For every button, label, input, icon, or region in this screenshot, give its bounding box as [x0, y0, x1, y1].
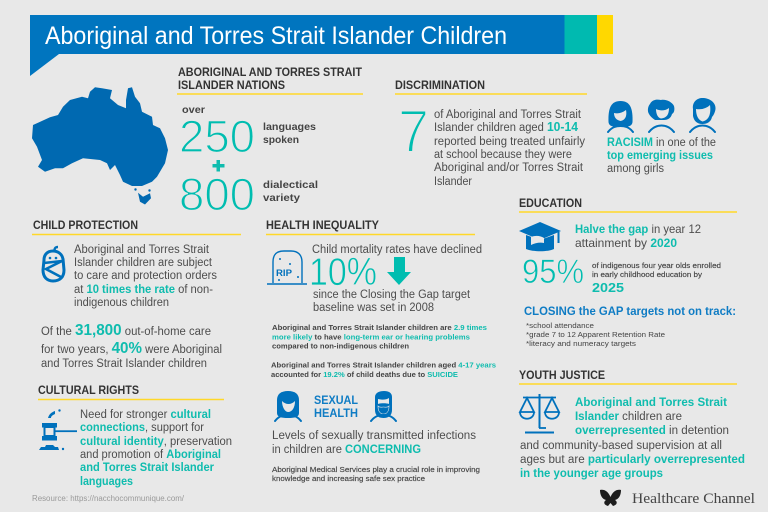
icon: butterfly — [600, 490, 621, 506]
text: hearing problems — [272, 323, 487, 350]
text: cultural rights body — [80, 409, 232, 488]
heading: cultural rights: CULTURAL RIGHTS — [38, 385, 139, 397]
text: care orders — [74, 244, 217, 309]
label: sexual health: SEXUAL — [314, 393, 358, 407]
text: suicide: accounted for 19.2% of child deaths due to SUICIDE — [271, 370, 458, 379]
text: care orders: at 10 times the rate of non- — [74, 284, 213, 296]
text: discrimination body: reported being treated unfairly — [434, 136, 585, 148]
text: hearing problems: Aboriginal and Torres Strait Islander children are 2.9 times — [272, 323, 487, 332]
text: racism callout: top emerging issues — [607, 150, 713, 162]
text: cultural rights body: languages — [80, 476, 133, 488]
label: dialectical variety — [263, 179, 318, 204]
text: hearing problems: more likely to have long-term ear or hearing problems — [272, 332, 470, 342]
text: youth justice body: in the younger age groups — [520, 468, 663, 480]
text: infection levels — [272, 430, 476, 456]
icon: RIP gravestone: RIP — [276, 268, 292, 278]
text: out-of-home care: Of the 31,800 out-of-home care — [41, 322, 211, 339]
text: halve the gap: Halve the gap in year 12 — [575, 222, 701, 236]
panel: child protection — [32, 220, 241, 370]
text: youth justice body: and community-based supervision at all — [520, 440, 722, 452]
text: racism callout — [607, 137, 716, 175]
text: suicide: Aboriginal and Torres Strait Islander children aged 4-17 years — [271, 360, 496, 370]
text: hearing problems: compared to non-indigenous children — [272, 342, 409, 350]
text: discrimination body: Islander children aged 10-14 — [434, 120, 578, 134]
text: discrimination body: at school because they were — [434, 149, 572, 161]
heading: nations: ABORIGINAL AND TORRES STRAIT — [178, 67, 362, 79]
title: Aboriginal and Torres Strait Islander Children — [45, 22, 507, 50]
icon: swaddled baby — [43, 247, 64, 281]
text: racism callout: RACISIM in one of the — [607, 137, 716, 149]
text: youth justice body: ages but are particularly overrepresented — [520, 454, 745, 466]
logo: Healthcare Channel — [600, 490, 755, 507]
heading: nations: ISLANDER NATIONS — [178, 80, 285, 92]
heading: education: EDUCATION — [519, 198, 582, 210]
text: racism callout: among girls — [607, 163, 664, 175]
text: discrimination body: Islander — [434, 176, 472, 188]
icon: plus — [212, 160, 224, 172]
text: infection levels: in children are CONCERNING — [272, 444, 421, 456]
icon: RIP gravestone — [267, 251, 307, 284]
arrow: down — [387, 257, 411, 285]
list: targets: *grade 7 to 12 Apparent Retention Rate — [526, 330, 665, 339]
text: enrolment — [592, 261, 721, 295]
heading: discrimination: DISCRIMINATION — [395, 80, 485, 92]
stat: 250: 250 — [179, 111, 255, 162]
heading: child protection: CHILD PROTECTION — [33, 220, 138, 232]
label: languages spoken: languages — [263, 121, 316, 133]
text: since baseline — [313, 289, 471, 314]
text: care orders: to care and protection orders — [74, 270, 217, 282]
text: child mortality: Child mortality rates have declined — [312, 244, 482, 256]
label: dialectical variety: variety — [263, 192, 300, 204]
text: youth justice body — [520, 397, 745, 480]
text: youth justice body: Aboriginal and Torres Strait — [575, 397, 727, 409]
text: since baseline: since the Closing the Gap target — [313, 289, 471, 301]
text: cultural rights body: cultural identity, preservation — [80, 436, 232, 448]
list: targets — [526, 321, 665, 348]
stat: 95%: 95% — [522, 253, 584, 291]
icon: scales of justice — [520, 394, 559, 432]
logo text: Healthcare Channel — [632, 491, 755, 507]
panel: youth justice — [519, 370, 745, 480]
list: targets: *literacy and numeracy targets — [526, 339, 636, 348]
panel: health inequality — [266, 220, 496, 483]
text: out-of-home care: for two years, 40% were Aboriginal — [41, 340, 222, 357]
icon: map of Australia — [32, 87, 168, 204]
heading: nations — [177, 67, 363, 94]
text: medical services: Aboriginal Medical Services play a crucial role in improving — [272, 465, 480, 474]
label: sexual health: HEALTH — [314, 406, 358, 420]
text: enrolment: of indigenous four year olds enrolled — [592, 261, 721, 270]
text: care orders: indigenous children — [74, 297, 169, 309]
text: out-of-home care — [41, 322, 222, 370]
heading: youth justice: YOUTH JUSTICE — [519, 370, 605, 382]
text: discrimination body: of Aboriginal and Torres Strait — [434, 109, 582, 121]
text: targets heading: CLOSING the GAP targets not on track: — [524, 306, 736, 318]
list: targets: *school attendance — [526, 321, 594, 330]
title banner — [30, 15, 613, 76]
label: over: over — [182, 104, 205, 116]
text: out-of-home care: and Torres Strait Islander children — [41, 358, 207, 370]
source note: Resource: https://nacchocommunique.com/ — [32, 494, 185, 503]
text: cultural rights body: Need for stronger cultural — [80, 409, 211, 421]
panel: nations — [177, 67, 363, 220]
stat: 800: 800 — [179, 169, 255, 220]
text: halve the gap — [575, 222, 701, 250]
text: medical services: knowledge and increasing safe sex practice — [272, 474, 425, 483]
icon: three girls — [608, 98, 716, 132]
label: dialectical variety: dialectical — [263, 179, 318, 191]
stat: 10%: 10% — [309, 251, 377, 294]
panel: education — [519, 198, 737, 348]
text: discrimination body — [434, 109, 585, 188]
panel: discrimination — [395, 80, 716, 188]
icon: woman — [275, 391, 301, 421]
text: cultural rights body: and promotion of Aboriginal — [80, 449, 221, 461]
stat: 7: 7 — [398, 98, 429, 165]
label: sexual health — [314, 393, 358, 420]
text: infection levels: Levels of sexually transmitted infections — [272, 430, 476, 442]
text: cultural rights body: connections, support for — [80, 422, 204, 434]
text: youth justice body: overrepresented in detention — [575, 425, 729, 437]
text: care orders: Islander children are subject — [74, 257, 213, 269]
icon: man — [371, 391, 396, 421]
text: care orders: Aboriginal and Torres Strait — [74, 244, 210, 256]
icon: gavel — [39, 409, 77, 450]
text: enrolment: in early childhood education by — [592, 270, 702, 279]
text: medical services — [272, 465, 480, 483]
text: cultural rights body: and Torres Strait Islander — [80, 462, 215, 474]
text: suicide — [271, 360, 496, 379]
text: youth justice body: Islander children are — [575, 411, 682, 423]
icon: graduation cap — [519, 222, 561, 251]
text: enrolment: 2025 — [592, 280, 624, 295]
panel: cultural rights — [38, 385, 232, 488]
heading: health inequality: HEALTH INEQUALITY — [266, 220, 379, 232]
text: halve the gap: attainment by 2020 — [575, 236, 677, 250]
label: languages spoken — [263, 121, 316, 146]
text: discrimination body: Aboriginal and/or Torres Strait — [434, 162, 584, 174]
label: languages spoken: spoken — [263, 134, 299, 146]
text: since baseline: baseline was set in 2008 — [313, 302, 434, 314]
